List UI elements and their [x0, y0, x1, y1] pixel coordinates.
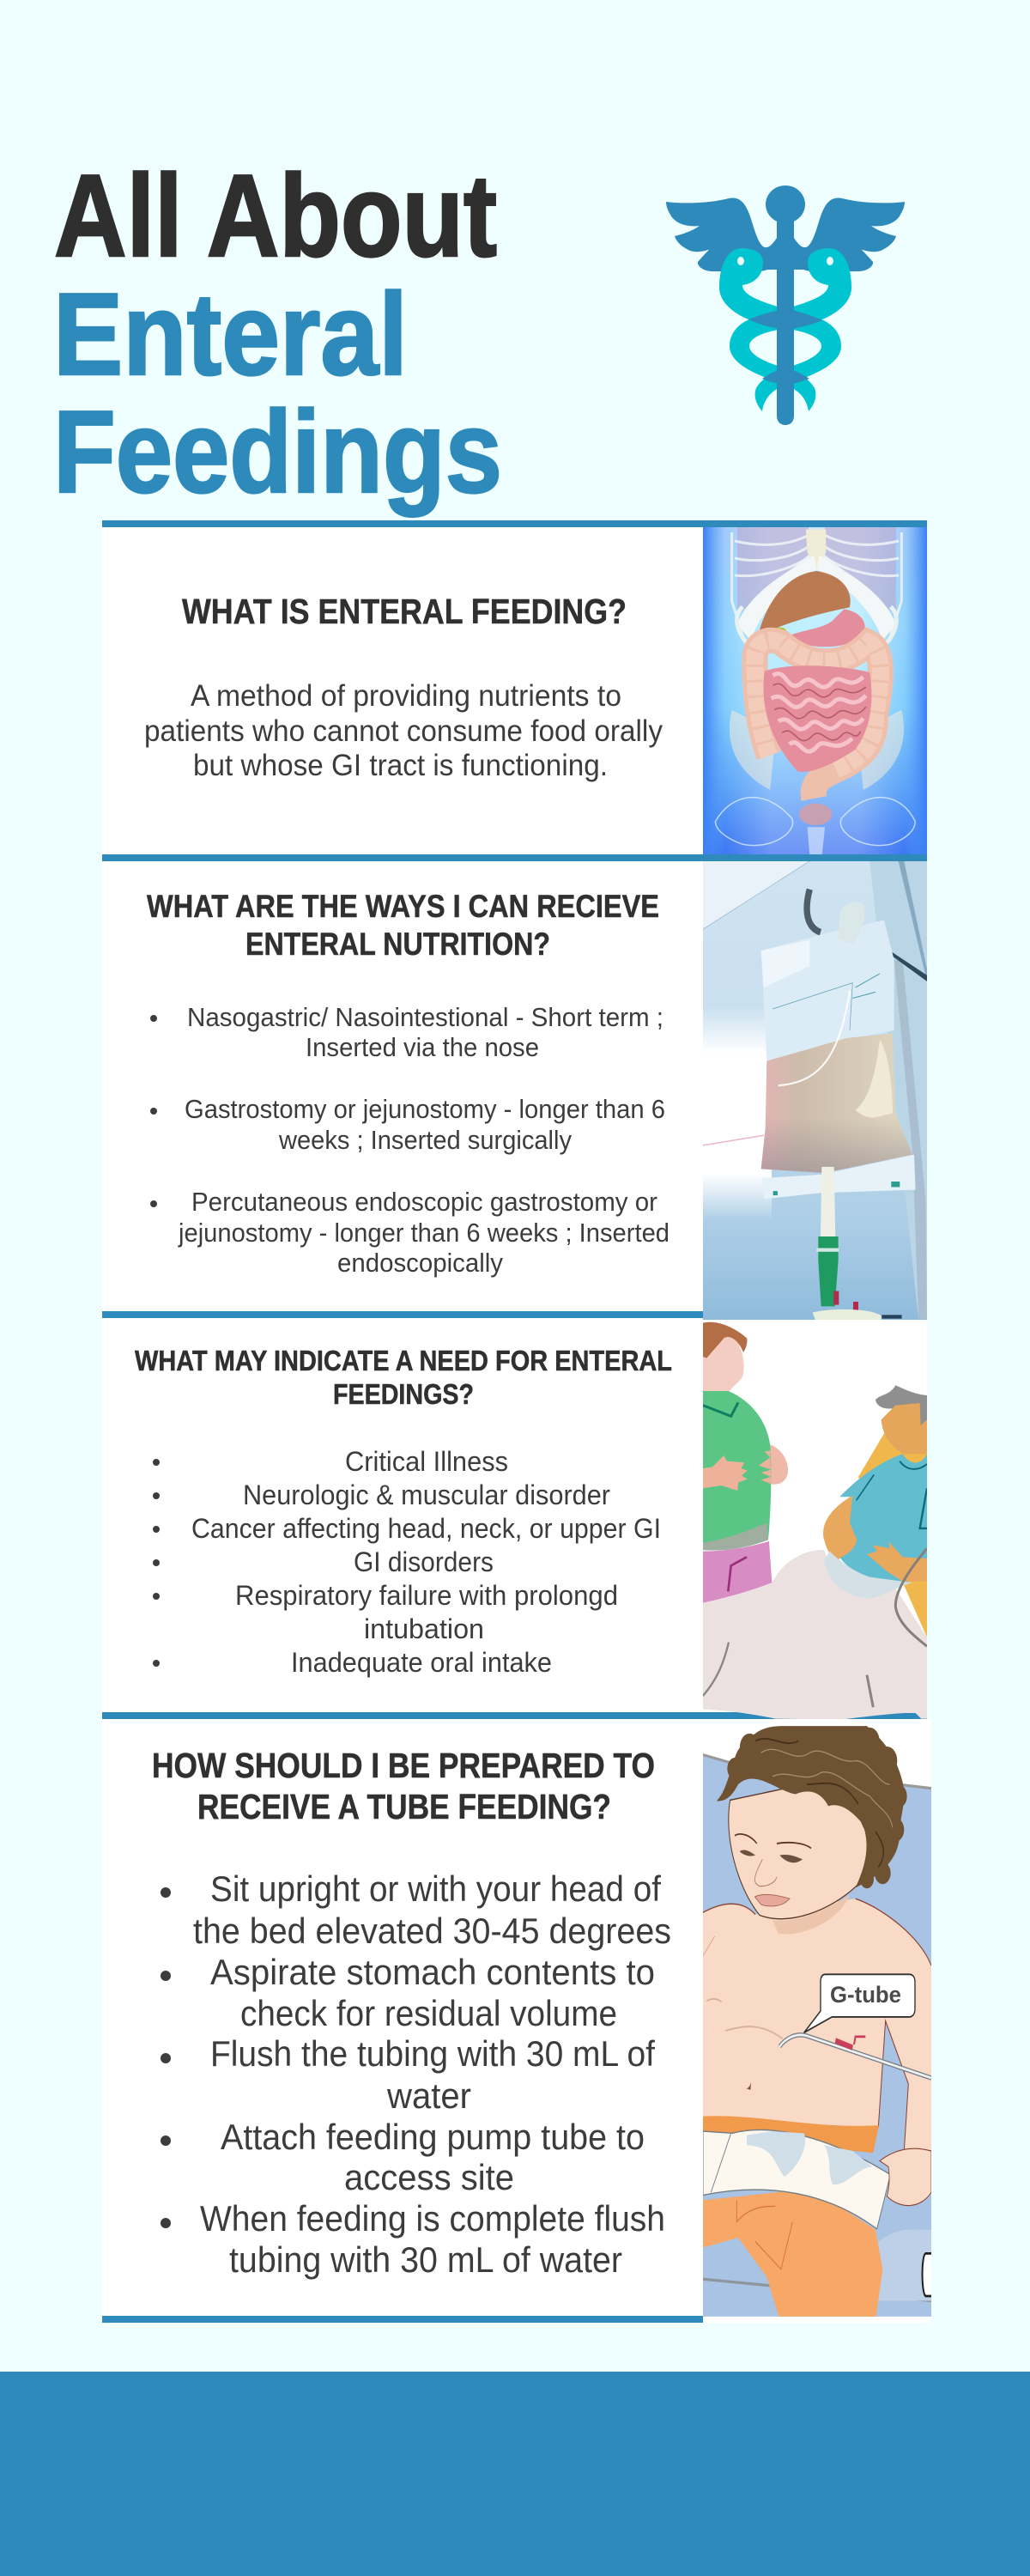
bullet list	[150, 1002, 670, 1278]
bed sheet	[703, 1550, 927, 1720]
costal cartilage	[737, 556, 816, 641]
title: All About	[54, 150, 497, 281]
green connector	[818, 1236, 839, 1306]
red caps	[833, 1291, 839, 1305]
text block	[144, 679, 663, 782]
small intestine	[763, 665, 871, 772]
heading: WHAT IS ENTERAL FEEDING?	[182, 592, 627, 631]
torso outline	[703, 1899, 931, 2151]
left man head	[703, 1337, 744, 1391]
heading: WHAT ARE THE WAYS I CAN RECIEVE	[147, 889, 659, 924]
left wing	[666, 198, 777, 271]
liver	[758, 571, 851, 635]
book	[703, 2130, 890, 2229]
ceiling corner	[703, 861, 809, 929]
bullet list: Critical Illness	[345, 1446, 508, 1477]
heading: HOW SHOULD I BE PREPARED TO	[152, 1746, 655, 1785]
fold lines	[703, 1643, 729, 1696]
ribs	[732, 532, 901, 635]
light glare	[703, 1005, 772, 1220]
snake one	[719, 248, 841, 411]
title: Feedings	[53, 386, 502, 517]
bag bottom strip	[762, 1155, 916, 1199]
callout bubble	[804, 1974, 915, 2032]
iv tube	[895, 1548, 927, 1646]
right man background	[858, 1424, 927, 1637]
head	[729, 1777, 868, 1919]
image: two patients illustration	[703, 1322, 927, 1720]
bullet list: tubing with 30 mL of water	[229, 2239, 622, 2280]
right man head	[882, 1403, 927, 1454]
bullet list: water	[386, 2075, 471, 2116]
bullet list: When feeding is complete flush	[200, 2198, 665, 2239]
gallbladder	[776, 627, 786, 630]
left man hair	[703, 1322, 747, 1358]
panel: preparing for tube feeding	[152, 1746, 671, 2280]
stomach	[786, 609, 865, 647]
right man shirt	[839, 1454, 927, 1585]
bullet list: Gastrostomy or jejunostomy - longer than 6	[185, 1094, 665, 1124]
base tray	[813, 1309, 882, 1320]
bladder	[799, 804, 832, 825]
ear	[862, 1826, 886, 1872]
bullet list: Respiratory failure with prolongd	[235, 1580, 618, 1611]
bullet list: Nasogastric/ Nasointestional - Short term ;	[187, 1002, 663, 1032]
right man left arm	[823, 1496, 857, 1563]
intestine folds	[772, 674, 866, 751]
right man hat	[876, 1385, 927, 1409]
bullet list: access site	[344, 2157, 514, 2197]
bullet list: Inserted via the nose	[306, 1032, 539, 1062]
hair	[717, 1726, 907, 1888]
colon segments	[754, 641, 881, 770]
left man hands	[703, 1455, 748, 1491]
bullet list: Percutaneous endoscopic gastrostomy or	[191, 1187, 657, 1217]
tube	[779, 2035, 931, 2078]
image: feeding bag on pole	[703, 861, 927, 1320]
waistband	[703, 2116, 879, 2153]
bullet list: GI disorders	[354, 1546, 494, 1577]
text block: patients who cannot consume food orally	[144, 714, 663, 748]
pole	[894, 960, 927, 1319]
nose	[754, 1859, 777, 1886]
hook	[807, 890, 821, 933]
pink streak	[703, 1135, 764, 1145]
sternum	[806, 530, 826, 569]
heading: ENTERAL NUTRITION?	[245, 927, 550, 962]
chin shadow	[772, 1895, 850, 1934]
bed pillow	[703, 1723, 931, 2317]
mouth	[754, 1894, 790, 1906]
orb	[766, 185, 805, 223]
text block: but whose GI tract is functioning.	[193, 749, 608, 782]
snake eyes	[737, 257, 833, 265]
bullet list: jejunostomy - longer than 6 weeks ; Inserted	[178, 1218, 670, 1248]
right wing	[794, 198, 905, 271]
large intestine	[754, 641, 881, 799]
bullet list: intubation	[364, 1613, 484, 1644]
divider bars	[102, 520, 927, 2323]
bullet list: endoscopically	[337, 1248, 503, 1278]
hand	[880, 2148, 931, 2206]
hip shading	[730, 710, 776, 790]
bag spout	[839, 902, 865, 945]
panel backgrounds	[102, 527, 931, 2323]
hair curls	[761, 1749, 893, 1828]
text block: A method of providing nutrients to	[191, 679, 621, 713]
bullet list	[153, 1446, 661, 1678]
chest details	[706, 1999, 783, 2038]
eyes	[740, 1850, 803, 1862]
lower crossing	[762, 368, 809, 385]
bullet list: Neurologic & muscular disorder	[243, 1479, 610, 1510]
bullet list	[161, 1868, 671, 2280]
spine base	[808, 827, 825, 854]
trousers	[703, 2189, 882, 2317]
bullet list: Inadequate oral intake	[291, 1647, 552, 1678]
left man shorts	[703, 1541, 772, 1603]
bullet list: Flush the tubing with 30 mL of	[210, 2033, 655, 2074]
heading	[135, 1345, 672, 1410]
left man arm behind	[770, 1444, 788, 1485]
panel: ways to receive enteral nutrition	[147, 889, 670, 1278]
heading: FEEDINGS?	[333, 1378, 474, 1410]
left man shirt	[703, 1391, 771, 1551]
image: child with G-tube	[703, 1723, 931, 2317]
heading: WHAT MAY INDICATE A NEED FOR ENTERAL	[135, 1345, 672, 1376]
wall shade	[869, 861, 927, 1319]
bullet list: Aspirate stomach contents to	[210, 1952, 655, 1992]
bullet list: Sit upright or with your head of	[210, 1868, 661, 1909]
bullet list: Attach feeding pump tube to	[221, 2117, 645, 2157]
bag seal	[761, 940, 809, 987]
footer band	[0, 2372, 1030, 2576]
callout label: G-tube	[830, 1982, 901, 2008]
book map	[747, 2131, 873, 2184]
panel: what is enteral feeding	[144, 592, 663, 782]
divider segment under sheet	[703, 1712, 927, 1719]
eyebrows	[735, 1834, 811, 1848]
panel: indications for enteral feeding	[135, 1345, 672, 1678]
bullet list: weeks ; Inserted surgically	[278, 1125, 572, 1155]
right man right hand	[867, 1541, 927, 1582]
wing joint	[755, 249, 815, 270]
heading	[152, 1746, 655, 1826]
bullet list: the bed elevated 30-45 degrees	[193, 1911, 671, 1951]
pillow tag	[923, 2253, 931, 2296]
image: abdominal anatomy	[703, 526, 927, 854]
icon: caduceus	[666, 185, 905, 425]
bag top clear	[761, 920, 894, 1061]
title: Enteral	[53, 269, 408, 399]
tube	[821, 1167, 835, 1237]
heading	[147, 889, 659, 962]
milk liquid	[761, 1034, 912, 1173]
torso	[703, 1899, 931, 2151]
bullet list: Cancer affecting head, neck, or upper GI	[191, 1513, 661, 1544]
liquid highlight	[779, 991, 850, 1085]
bullet list: check for residual volume	[240, 1993, 617, 2033]
lungs	[737, 526, 811, 616]
liquid shading	[760, 1127, 912, 1173]
staff	[777, 219, 794, 425]
snake two	[730, 248, 851, 411]
title	[53, 150, 502, 517]
pelvis	[715, 798, 915, 846]
upper crossing	[748, 309, 822, 329]
heading: RECEIVE A TUBE FEEDING?	[197, 1787, 611, 1826]
